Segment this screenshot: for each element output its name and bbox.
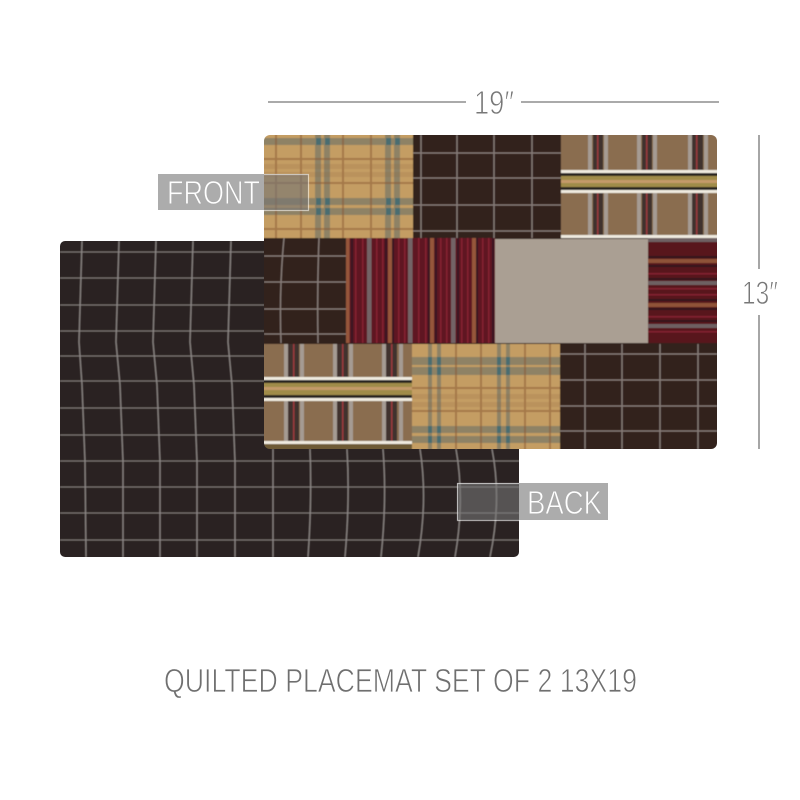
patch: plain grey middle — [495, 239, 648, 343]
patch: tan plaid bottom middle — [412, 344, 560, 453]
label: front: FRONT — [167, 174, 260, 211]
caption: QUILTED PLACEMAT SET OF 2 13X19 — [164, 662, 637, 699]
height dimension: 13 inches: 13″ — [742, 275, 778, 311]
patch: red stripes middle — [346, 238, 495, 343]
label: back: BACK — [527, 484, 602, 521]
patch: dark check bottom right — [560, 344, 721, 453]
patch: tan plaid top left — [260, 131, 413, 238]
patch: brown plaid bottom left — [260, 344, 412, 453]
width dimension: 19 inches: 19″ — [474, 84, 514, 121]
patch: dark check top middle — [413, 131, 561, 238]
patch: dark check middle left — [260, 238, 346, 343]
label: back — [457, 483, 608, 521]
patch: brown plaid top right — [561, 131, 721, 238]
front placemat — [260, 131, 721, 453]
back placemat — [56, 237, 523, 561]
patch: red horizontal stripes right — [648, 238, 721, 343]
